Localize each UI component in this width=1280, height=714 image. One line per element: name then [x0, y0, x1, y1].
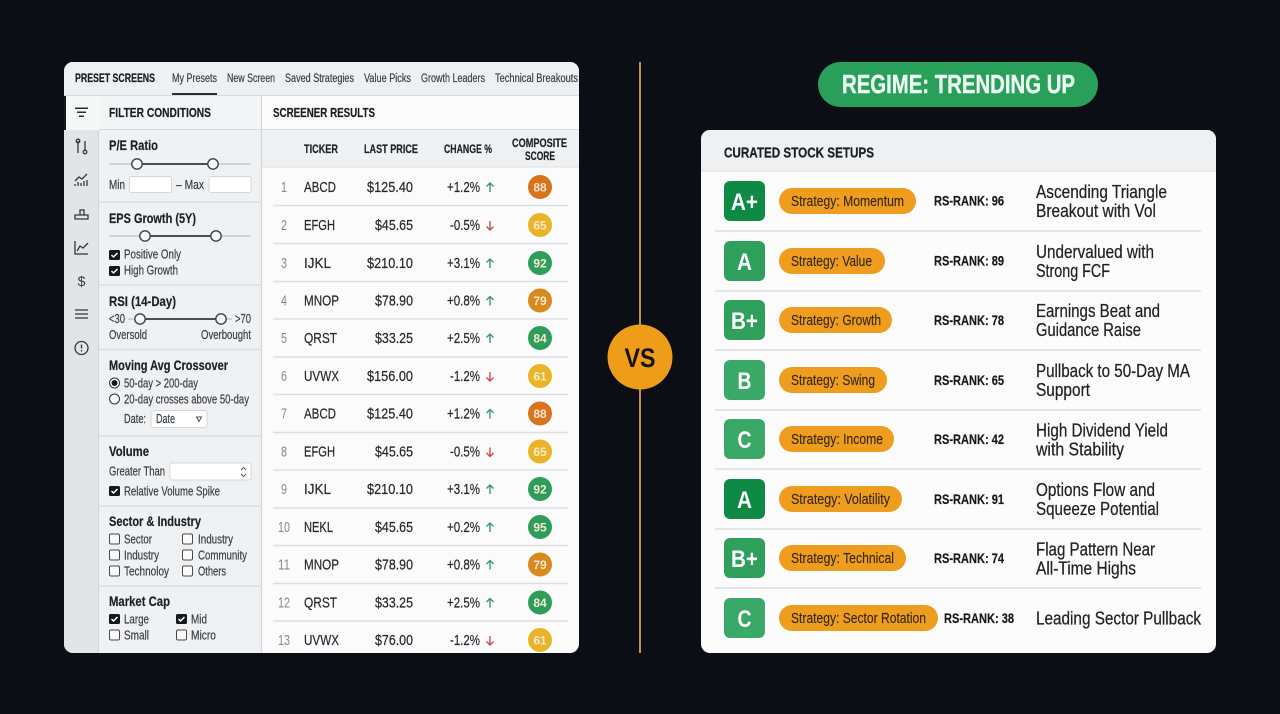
row 13: -1.2%: [450, 632, 480, 649]
row 10: 10: [278, 520, 290, 536]
row 13: $76.00: [375, 632, 413, 649]
row 6: 6: [281, 369, 287, 385]
tab bar: My Presets: [172, 73, 217, 85]
row 2: -0.5%: [450, 217, 480, 234]
filter: P/E ratio: P/E Ratio: [109, 137, 158, 153]
row 11: MNOP: [304, 556, 339, 574]
setup 6: [715, 479, 1201, 529]
filter: moving average crossover: 50-day > 200-day: [124, 376, 199, 390]
heading: filter conditions: FILTER CONDITIONS: [109, 105, 211, 120]
table header: [304, 138, 567, 163]
setup 4: Pullback to 50-Day MA: [1036, 361, 1190, 381]
setup 7: [715, 538, 1201, 588]
tab bar: Saved Strategies: [285, 73, 354, 85]
heading: CURATED STOCK SETUPS: [724, 146, 874, 162]
filter: sector and industry: Sector: [124, 532, 152, 546]
filter: moving average crossover: Date:: [124, 412, 146, 426]
filter: volume: Greater Than: [109, 464, 165, 478]
row 13: 13: [278, 633, 290, 649]
row 6: UVWX: [304, 368, 339, 385]
setup 7: All-Time Highs: [1036, 558, 1136, 578]
filter: volume: [99, 443, 261, 506]
table header: COMPOSITE: [512, 138, 567, 150]
row 11: $78.90: [375, 556, 413, 574]
filter: RSI: [99, 293, 261, 350]
divider line: [639, 62, 641, 653]
filter: market cap: Large: [124, 612, 149, 626]
row 4: +0.8%: [447, 292, 480, 310]
setup 2: RS-RANK: 89: [934, 254, 1004, 268]
row 7: +1.2%: [447, 406, 480, 422]
row 10: NEKL: [304, 519, 333, 536]
filter: market cap: Micro: [191, 628, 216, 642]
row 3: 3: [281, 256, 287, 272]
row 3: [273, 251, 568, 282]
row 11: 79: [533, 558, 547, 572]
row 12: +2.5%: [447, 594, 480, 612]
sidebar icons: $: [78, 273, 86, 289]
setup 8: Leading Sector Pullback: [1036, 608, 1202, 628]
setup 4: RS-RANK: 65: [934, 373, 1004, 388]
row 3: +3.1%: [447, 255, 480, 272]
row 13: UVWX: [304, 632, 339, 649]
row 9: [273, 477, 568, 508]
setup 4: Support: [1036, 380, 1090, 400]
setup 3: [715, 300, 1201, 350]
setup 8: [724, 598, 1202, 638]
setup 2: A: [737, 249, 752, 276]
row 8: -0.5%: [450, 444, 480, 460]
icon: filter: [75, 108, 88, 117]
setup 2: [715, 241, 1201, 291]
panel: stock screener: [64, 62, 579, 653]
filter: RSI: >70: [235, 312, 251, 326]
filter: market cap: Mid: [191, 612, 207, 626]
filter: EPS growth: Positive Only: [124, 248, 182, 262]
setup 4: Strategy: Swing: [791, 373, 875, 389]
setup 3: Guidance Raise: [1036, 320, 1141, 340]
row 2: 65: [533, 218, 547, 232]
row 8: $45.65: [375, 444, 413, 460]
row 4: MNOP: [304, 292, 339, 310]
filter: EPS growth: [99, 210, 261, 285]
row 1: $125.40: [367, 179, 413, 196]
row 3: IJKL: [304, 255, 331, 272]
tab bar: Technical Breakouts: [495, 73, 578, 85]
filter: volume: Volume: [109, 443, 149, 459]
panel: curated stock setups: [701, 130, 1216, 653]
tab bar: PRESET SCREENS: [75, 73, 155, 85]
row 5: 84: [533, 332, 547, 346]
row 1: 88: [533, 180, 547, 194]
filter: EPS growth: High Growth: [124, 264, 178, 278]
setup 8: Strategy: Sector Rotation: [791, 611, 926, 627]
row 2: EFGH: [304, 217, 335, 234]
filter: P/E ratio: Min: [109, 178, 125, 192]
tab bar: [75, 73, 578, 95]
row 8: EFGH: [304, 444, 335, 460]
setup 1: Strategy: Momentum: [791, 194, 904, 210]
row 10: [273, 515, 568, 546]
setup 3: RS-RANK: 78: [934, 313, 1004, 328]
filter: sector and industry: Community: [198, 548, 248, 562]
setup 6: A: [737, 487, 752, 514]
row 3: 92: [533, 256, 547, 270]
setup 4: B: [738, 368, 752, 395]
row 6: -1.2%: [450, 368, 480, 385]
setup 1: A+: [731, 189, 758, 216]
setup 1: [715, 181, 1201, 231]
sidebar icons: [75, 139, 88, 354]
row 8: [273, 440, 568, 470]
filter: EPS growth: EPS Growth (5Y): [109, 210, 196, 226]
row 12: 12: [278, 596, 290, 612]
filter: moving average crossover: 20-day crosses above 50-day: [124, 392, 250, 406]
row 10: 95: [533, 520, 547, 534]
row 7: ABCD: [304, 406, 336, 422]
table header: TICKER: [304, 144, 339, 156]
table header: CHANGE %: [444, 144, 492, 156]
filter: RSI: <30: [109, 312, 125, 326]
filter: sector and industry: [99, 513, 261, 586]
row 4: 79: [533, 294, 547, 308]
setup 6: RS-RANK: 91: [934, 492, 1004, 507]
filter: sector and industry: Technoloy: [124, 564, 170, 578]
row 12: $33.25: [375, 594, 413, 612]
setup 6: Squeeze Potential: [1036, 499, 1159, 519]
regime pill: REGIME: TRENDING UP: [842, 69, 1075, 99]
tab bar: New Screen: [227, 73, 275, 85]
filter: market cap: Market Cap: [109, 593, 170, 609]
setup 7: B+: [731, 546, 758, 573]
filter: sector and industry: Industry: [124, 548, 160, 562]
row 5: 5: [281, 331, 287, 347]
row 4: 4: [281, 294, 287, 310]
regime pill: [818, 62, 1098, 107]
setup 2: Strategy: Value: [791, 254, 872, 270]
row 7: 88: [533, 407, 547, 421]
filter: sector and industry: Industry: [198, 532, 234, 546]
row 1: [273, 175, 568, 206]
table header: SCORE: [525, 151, 555, 163]
filter: moving average crossover: Date: [156, 412, 175, 426]
row 10: $45.65: [375, 519, 413, 536]
row 7: 7: [281, 406, 287, 422]
row 7: [273, 402, 568, 432]
row 5: QRST: [304, 330, 337, 347]
filter: sector and industry: Others: [198, 564, 226, 578]
setup 5: Strategy: Income: [791, 432, 883, 448]
row 9: IJKL: [304, 481, 331, 498]
row 9: 92: [533, 482, 547, 496]
setup 1: RS-RANK: 96: [934, 194, 1004, 208]
setup 5: RS-RANK: 42: [934, 432, 1004, 447]
row 4: [273, 288, 568, 319]
setup 1: Breakout with Vol: [1036, 201, 1156, 221]
row 12: [273, 590, 568, 621]
row 10: +0.2%: [447, 519, 480, 536]
row 8: 8: [281, 444, 287, 460]
row 1: 1: [281, 180, 287, 196]
row 9: 9: [281, 482, 287, 498]
filter: market cap: Small: [124, 628, 149, 642]
setup 7: Strategy: Technical: [791, 551, 894, 567]
heading: screener results: SCREENER RESULTS: [273, 105, 375, 120]
setup 2: Strong FCF: [1036, 261, 1110, 281]
filter: market cap: [109, 593, 216, 642]
row 9: $210.10: [367, 481, 413, 498]
row 2: [273, 213, 568, 244]
row 4: $78.90: [375, 292, 413, 310]
setup 4: [715, 360, 1201, 410]
VS badge: [608, 324, 672, 390]
row 13: [278, 628, 552, 652]
setup 5: C: [738, 427, 752, 454]
filter: sector and industry: Sector & Industry: [109, 513, 201, 529]
setup 8: RS-RANK: 38: [944, 611, 1014, 626]
row 6: $156.00: [367, 368, 413, 385]
row 11: +0.8%: [447, 556, 480, 574]
row 11: 11: [278, 558, 290, 574]
tab bar: Value Picks: [364, 73, 411, 85]
row 3: $210.10: [367, 255, 413, 272]
row 12: 84: [533, 596, 547, 610]
setup 7: RS-RANK: 74: [934, 551, 1004, 566]
filter: volume: Relative Volume Spike: [124, 484, 220, 498]
row 13: 61: [533, 634, 547, 648]
tab bar: Growth Leaders: [421, 73, 485, 85]
row 5: $33.25: [375, 330, 413, 347]
setup 6: Options Flow and: [1036, 480, 1155, 500]
row 5: +2.5%: [447, 330, 480, 347]
row 5: [273, 326, 568, 357]
setup 6: Strategy: Volatility: [791, 492, 891, 508]
setup 2: Undervalued with: [1036, 242, 1154, 262]
row 11: [273, 552, 568, 584]
setup 5: High Dividend Yield: [1036, 420, 1168, 440]
setup 3: Earnings Beat and: [1036, 301, 1160, 321]
setup 5: [715, 419, 1201, 469]
row 1: +1.2%: [447, 179, 480, 196]
filter: P/E ratio: [99, 137, 261, 202]
filter: RSI: RSI (14-Day): [109, 293, 176, 309]
row 6: [273, 364, 568, 394]
row 12: QRST: [304, 594, 337, 612]
setup 8: C: [738, 606, 752, 633]
row 1: ABCD: [304, 179, 336, 196]
row 2: $45.65: [375, 217, 413, 234]
row 9: +3.1%: [447, 481, 480, 498]
setup 3: Strategy: Growth: [791, 313, 881, 329]
table header: LAST PRICE: [364, 144, 418, 156]
filter: RSI: Overbought: [201, 328, 251, 342]
row 7: $125.40: [367, 406, 413, 422]
setup 3: B+: [731, 308, 758, 335]
filter: RSI: Oversold: [109, 328, 147, 342]
row 8: 65: [533, 445, 547, 459]
filter: moving average crossover: Moving Avg Crossover: [109, 357, 228, 373]
setup 7: Flag Pattern Near: [1036, 540, 1155, 560]
row 2: 2: [281, 218, 287, 234]
setup 1: Ascending Triangle: [1036, 182, 1167, 202]
filter: P/E ratio: – Max: [176, 178, 205, 192]
row 6: 61: [533, 370, 547, 384]
filter: moving average crossover: [99, 357, 261, 436]
VS badge: VS: [624, 343, 656, 373]
setup 5: with Stability: [1035, 440, 1124, 460]
